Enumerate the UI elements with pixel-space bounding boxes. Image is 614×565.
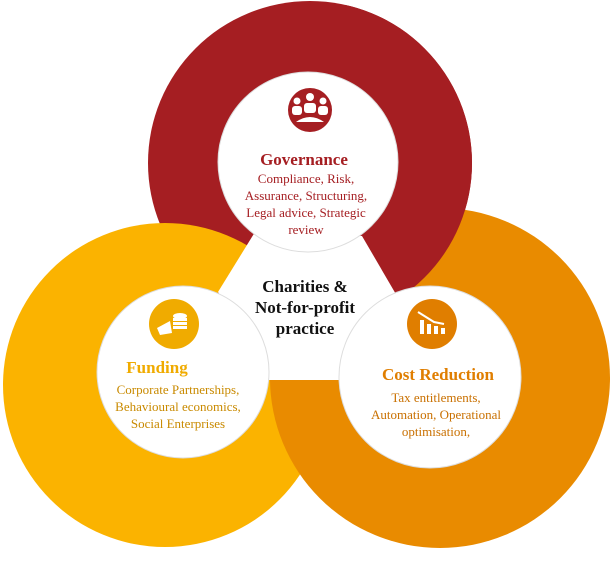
panel: cost reduction: Automation, Operational bbox=[371, 407, 501, 422]
icon: declining chart bbox=[407, 299, 457, 349]
panel: cost reduction: Tax entitlements, bbox=[391, 390, 481, 405]
ring: cost reduction bbox=[270, 208, 610, 548]
panel: cost reduction bbox=[339, 286, 521, 468]
panel: governance bbox=[218, 72, 398, 252]
center text: practice bbox=[276, 319, 335, 338]
panel: funding bbox=[97, 286, 269, 458]
panel: funding: Funding bbox=[126, 358, 188, 377]
panel: governance: Compliance, Risk, bbox=[258, 171, 354, 186]
panel: funding: Social Enterprises bbox=[131, 416, 225, 431]
panel: cost reduction: Cost Reduction bbox=[382, 365, 495, 384]
ring overlap: governance over cost reduction bbox=[345, 4, 472, 292]
icon: coins bbox=[149, 299, 199, 349]
ring: funding bbox=[3, 223, 327, 547]
panel: governance: review bbox=[288, 222, 324, 237]
center text: Not-for-profit bbox=[255, 298, 355, 317]
panel: governance: Legal advice, Strategic bbox=[246, 205, 366, 220]
ring: governance bbox=[148, 1, 472, 325]
center text bbox=[255, 277, 355, 338]
panel: governance: Governance bbox=[260, 150, 348, 169]
panel: funding: Behavioural economics, bbox=[115, 399, 241, 414]
panel: funding: Corporate Partnerships, bbox=[117, 382, 239, 397]
icon: people bbox=[288, 88, 332, 132]
panel: governance: Assurance, Structuring, bbox=[245, 188, 367, 203]
center text: Charities & bbox=[262, 277, 348, 296]
center white triangle bbox=[218, 232, 397, 380]
panel: cost reduction: optimisation, bbox=[402, 424, 470, 439]
